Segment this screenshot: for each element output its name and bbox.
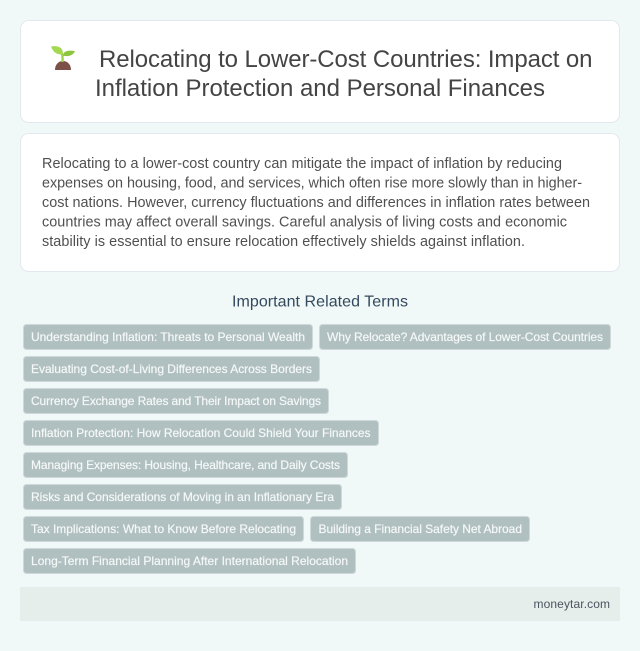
text block: summary [42, 156, 590, 250]
footer: source: moneytar.com [534, 597, 610, 611]
panel: summary paragraph card [20, 134, 620, 272]
tag: risks [24, 484, 342, 510]
title: Relocating to Lower-Cost Countries: Impact on [99, 46, 592, 73]
tag list [24, 324, 610, 574]
title: Inflation Protection and Personal Finances [95, 75, 545, 102]
tag: financial safety net: Building a Financial Safety Net Abroad [318, 522, 522, 536]
tag: inflation protection [24, 420, 378, 446]
tag: understanding inflation: Understanding Inflation: Threats to Personal Wealth [31, 330, 305, 344]
text block: summary: stability is essential to ensure relocation effectively shields against inflation. [42, 234, 525, 250]
tag: inflation protection: Inflation Protection: How Relocation Could Shield Your Finances [31, 426, 370, 440]
tag: financial safety net [310, 516, 530, 542]
tag: cost of living: Evaluating Cost-of-Living Differences Across Borders [31, 362, 312, 376]
tag: currency exchange: Currency Exchange Rates and Their Impact on Savings [31, 394, 321, 408]
text block: summary: Relocating to a lower-cost country can mitigate the impact of inflation by reducing [42, 156, 562, 172]
text block: summary: countries may affect overall savings. Careful analysis of living costs and economic [42, 214, 567, 230]
icon: seedling [51, 46, 75, 70]
tag: risks: Risks and Considerations of Moving in an Inflationary Era [31, 490, 334, 504]
tag: cost of living [24, 356, 320, 382]
tag: tax implications: Tax Implications: What to Know Before Relocating [31, 522, 296, 536]
text block: summary: cost nations. However, currency fluctuations and differences in inflation rates between [42, 195, 590, 211]
heading: important related terms: Important Related Terms [232, 294, 408, 310]
panel: title card [20, 20, 620, 122]
tag: managing expenses: Managing Expenses: Housing, Healthcare, and Daily Costs [31, 458, 340, 472]
tag: currency exchange [24, 388, 328, 414]
tag: tax implications [24, 516, 304, 542]
footer: source [20, 587, 620, 621]
title [95, 46, 592, 102]
tag: understanding inflation [24, 324, 312, 350]
tag: long-term planning: Long-Term Financial Planning After International Relocation [31, 554, 348, 568]
tag: managing expenses [24, 452, 348, 478]
tag: why relocate [320, 324, 610, 350]
tag: long-term planning [24, 548, 356, 574]
tag: why relocate: Why Relocate? Advantages of Lower-Cost Countries [327, 330, 603, 344]
text block: summary: expenses on housing, food, and services, which often rise more slowly than in higher- [42, 176, 582, 192]
